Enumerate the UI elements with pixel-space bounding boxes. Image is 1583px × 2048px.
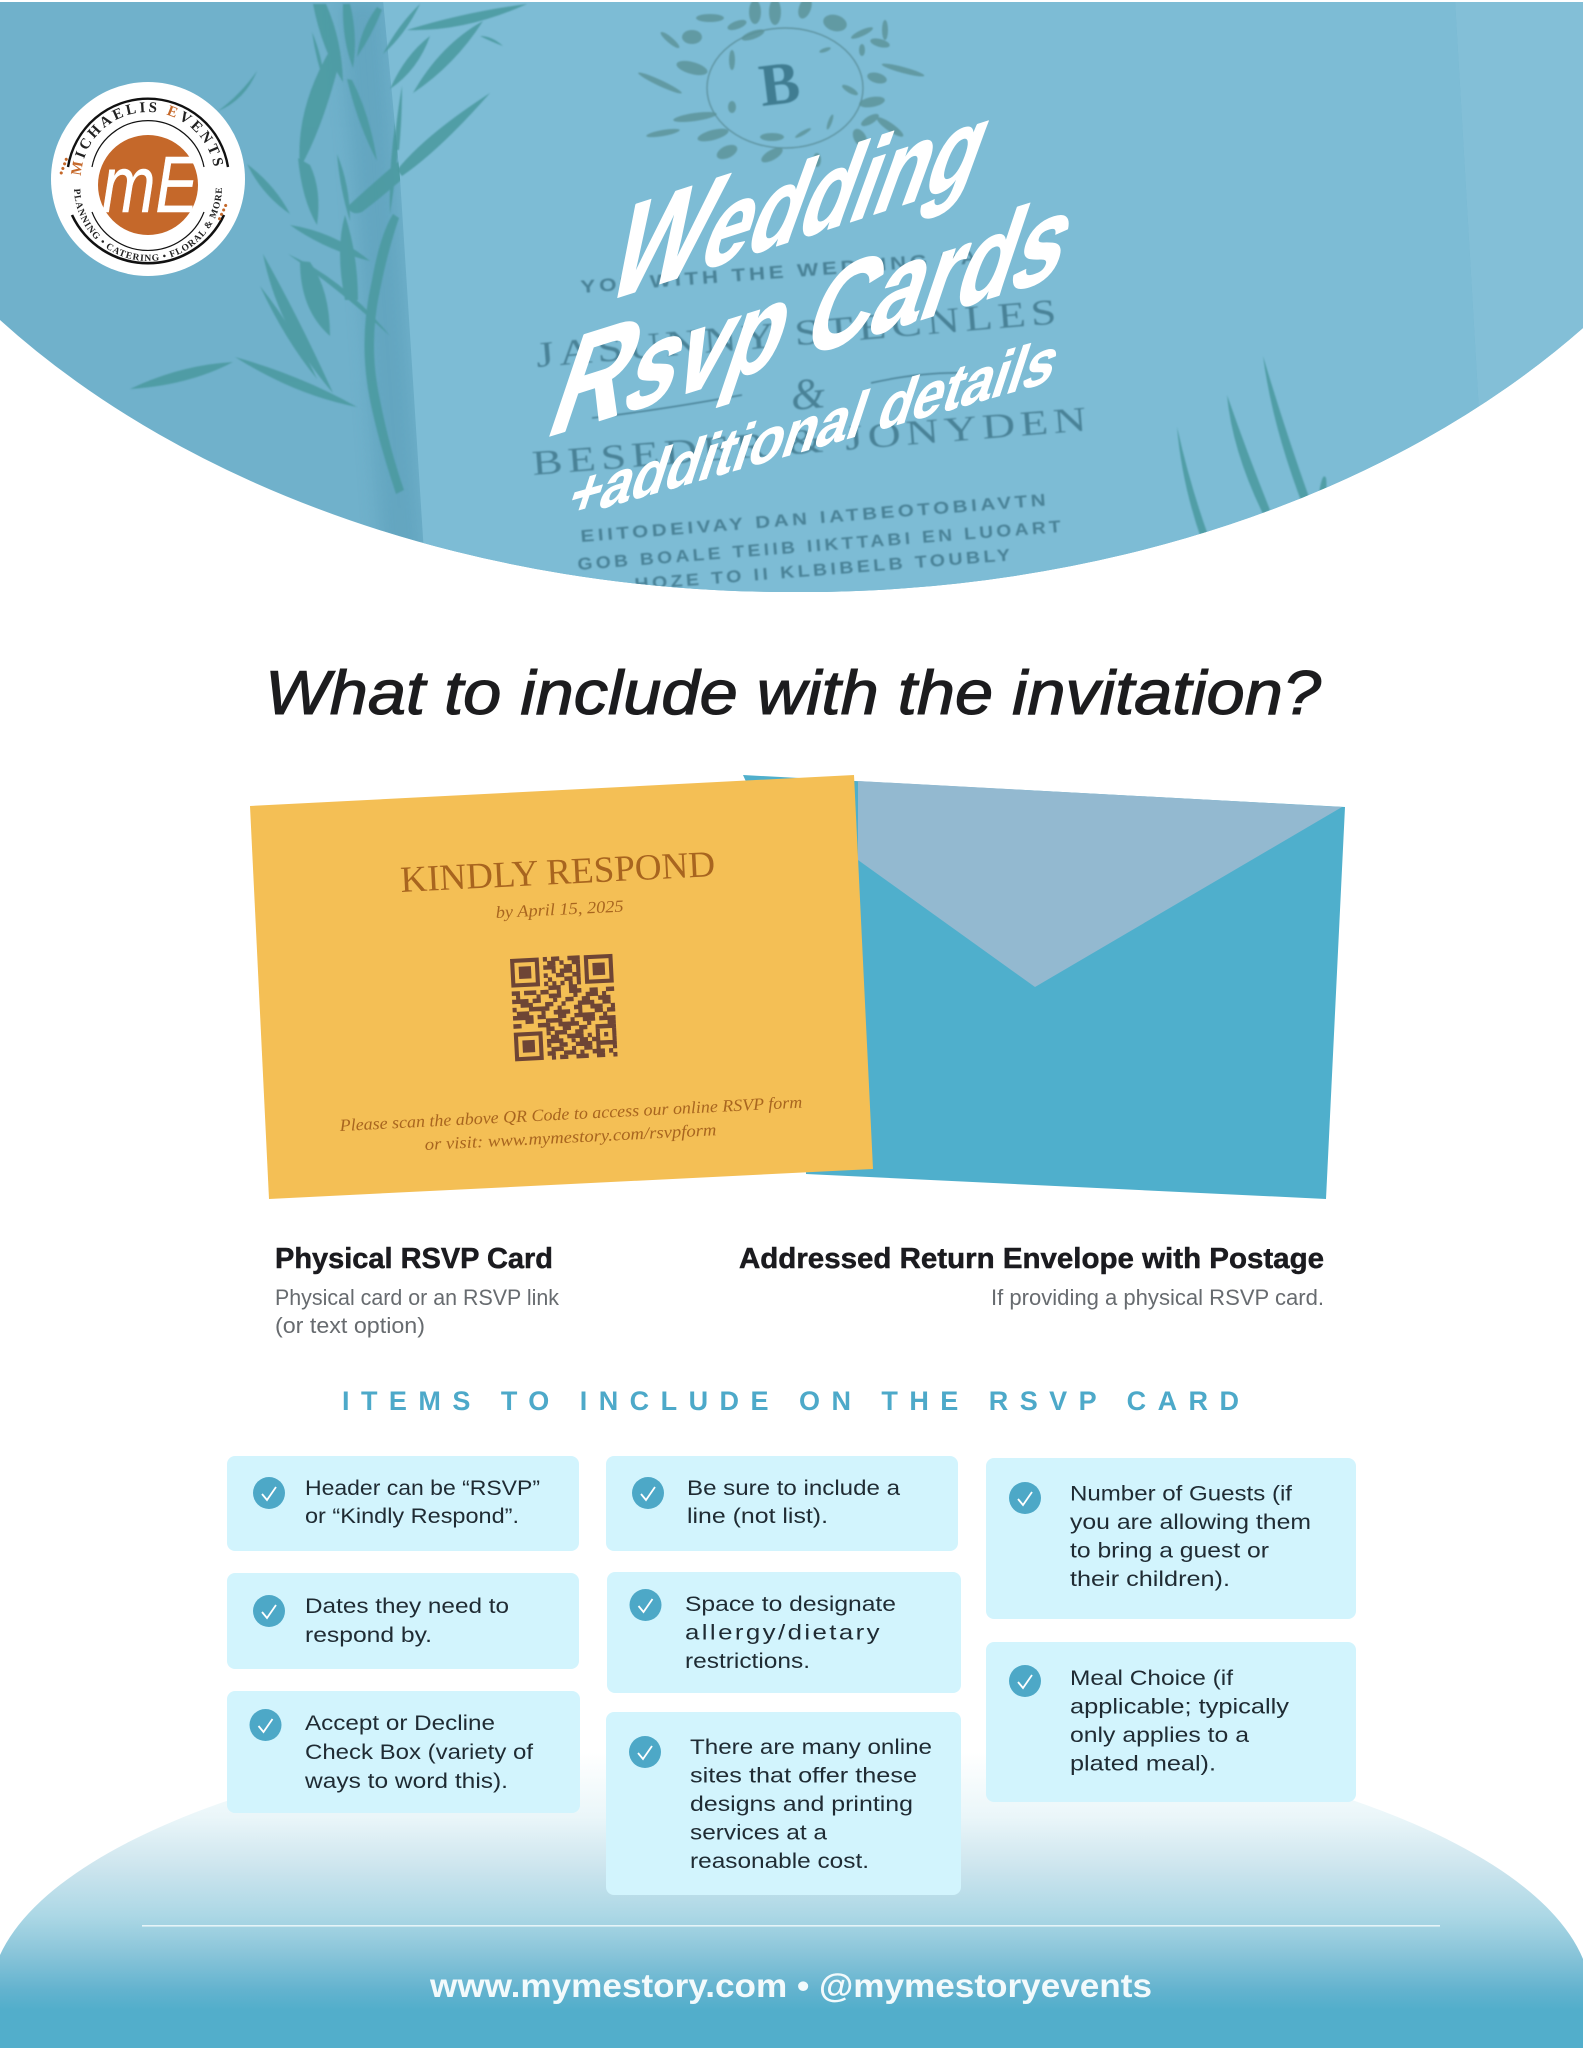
checklist card: number of guests: Number of Guests (if <box>1070 1482 1292 1506</box>
items heading: ITEMS TO INCLUDE ON THE RSVP CARD <box>342 1386 1239 1416</box>
RSVP card: by April 15, 2025 <box>495 897 624 922</box>
main script title <box>532 54 1100 533</box>
footer text: www.mymestory.com • @mymestoryevents <box>429 1967 1152 2004</box>
logo badge: PLANNING • CATERING • FLORAL & MORE <box>74 188 222 261</box>
label: return envelope: If providing a physical RSVP card. <box>991 1285 1324 1310</box>
checklist card: online sites: reasonable cost. <box>690 1849 869 1873</box>
invitation printed text: BESEDER & JONYDEN <box>531 399 1093 483</box>
checklist card: number of guests <box>986 1458 1356 1619</box>
invitation printed text: JASUNNY STECNLES <box>534 291 1063 375</box>
invitation printed text: GOB BOALE TEIIB IIKTTABI EN LUOART <box>577 517 1065 574</box>
checklist card: online sites <box>606 1712 961 1895</box>
checklist card: dates <box>227 1573 579 1669</box>
checklist card: meal choice: only applies to a <box>1070 1723 1249 1747</box>
checklist card: number of guests: you are allowing them <box>1070 1510 1311 1534</box>
checklist card: online sites: designs and printing <box>690 1792 913 1816</box>
checklist card: allergy: allergy/dietary <box>685 1620 882 1644</box>
label: return envelope <box>739 1243 1324 1310</box>
main script title: +additional details <box>559 322 1070 533</box>
leaves over the paper <box>383 4 1326 541</box>
checklist card: meal choice <box>986 1642 1356 1802</box>
checklist card: dates: respond by. <box>305 1623 432 1647</box>
hero photo banner <box>0 0 1583 600</box>
checklist card: online sites: sites that offer these <box>690 1764 917 1788</box>
invitation paper <box>383 0 1490 600</box>
checklist card: header <box>227 1456 579 1551</box>
invitation printed text: EIITODEIVAY DAN IATBEOTOBIAVTN <box>580 490 1050 546</box>
label: physical RSVP card <box>275 1243 560 1338</box>
label: physical RSVP card: Physical RSVP Card <box>275 1243 553 1275</box>
checklist card: allergy: restrictions. <box>685 1649 810 1673</box>
checklist card: allergy <box>607 1572 961 1693</box>
envelope flap <box>858 781 1342 987</box>
label: physical RSVP card: Physical card or an RSVP link <box>275 1285 560 1310</box>
checklist card: meal choice: Meal Choice (if <box>1070 1666 1233 1690</box>
checklist card: meal choice: applicable; typically <box>1070 1694 1289 1718</box>
checklist card: allergy: Space to designate <box>685 1592 896 1616</box>
paper shadow <box>346 2 423 543</box>
label: return envelope: Addressed Return Envelope with Postage <box>739 1243 1324 1275</box>
checklist card: dates: Dates they need to <box>305 1594 509 1618</box>
label: physical RSVP card: (or text option) <box>275 1313 425 1338</box>
checklist card: online sites: There are many online <box>690 1735 932 1759</box>
checklist card: accept or decline: Accept or Decline <box>305 1711 495 1735</box>
checklist card: number of guests: their children). <box>1070 1567 1230 1591</box>
wreath monogram: B <box>756 49 803 119</box>
checklist card: online sites: services at a <box>690 1820 827 1844</box>
RSVP card: or visit: www.mymestory.com/rsvpform <box>424 1120 717 1154</box>
footer dome <box>0 1720 1583 2048</box>
RSVP card: KINDLY RESPOND <box>399 844 716 901</box>
logo badge: •••• <box>214 201 233 223</box>
main script title: Rsvp Cards <box>532 145 1100 469</box>
invitation printed text: HOZE TO II KLBIBELB TOUBLY <box>634 545 1014 594</box>
checklist card: line <box>606 1456 958 1551</box>
envelope <box>743 775 1345 1199</box>
RSVP card: Please scan the above QR Code to access our online RSVP form <box>338 1093 803 1135</box>
checklist card: accept or decline <box>227 1691 580 1813</box>
checklist card: meal choice: plated meal). <box>1070 1752 1216 1776</box>
checklist card: number of guests: to bring a guest or <box>1070 1538 1269 1562</box>
logo badge: mE <box>102 140 199 229</box>
wreath monogram <box>637 0 925 167</box>
eucalyptus leaves left <box>131 4 404 494</box>
main script title: Wedding <box>589 54 1018 334</box>
section heading: What to include with the invitation? <box>265 659 1322 728</box>
checklist card: line: line (not list). <box>687 1504 828 1528</box>
checklist card: header: or “Kindly Respond”. <box>305 1504 519 1528</box>
checklist card: accept or decline: ways to word this). <box>304 1769 508 1793</box>
checklist card: header: Header can be “RSVP” <box>305 1476 540 1500</box>
logo badge: •••• <box>56 155 73 177</box>
invitation printed text: YOU WITH THE WEDDING DA <box>580 247 981 297</box>
logo badge: MICHAELIS EVENTS <box>70 102 224 176</box>
checklist card: accept or decline: Check Box (variety of <box>305 1740 533 1764</box>
invitation printed text: & <box>789 368 828 420</box>
checklist card: line: Be sure to include a <box>687 1476 900 1500</box>
QR code <box>510 954 618 1061</box>
invitation printed text <box>531 247 1093 594</box>
RSVP card <box>250 775 873 1199</box>
logo badge <box>51 82 245 276</box>
